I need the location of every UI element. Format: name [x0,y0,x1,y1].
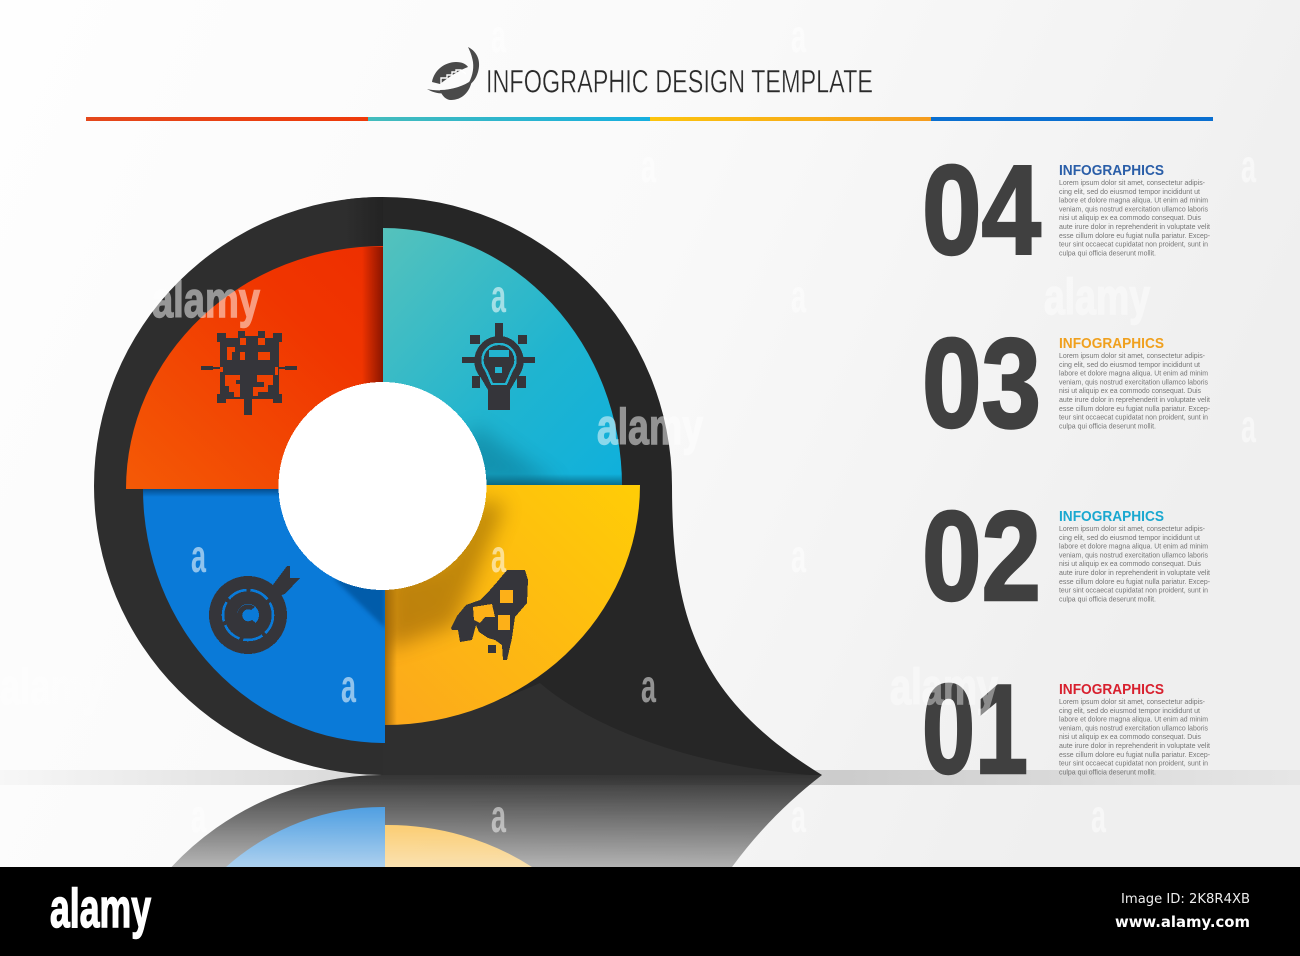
footer bar [0,867,1300,956]
watermarks: a [341,660,356,712]
text block 04: veniam, quis nostrud exercitation ullamco laboris [1059,204,1208,213]
text block 03: culpa qui officia deserunt mollit. [1059,421,1156,430]
text block 02: cing elit, sed do eiusmod tempor incididunt ut [1059,533,1201,542]
text block 04: culpa qui officia deserunt mollit. [1059,248,1156,257]
watermarks: a [641,140,656,192]
text block 01: culpa qui officia deserunt mollit. [1059,767,1156,776]
text block 04: teur sint occaecat cupidatat non proident, sunt in [1059,240,1208,249]
bubble top shading [345,197,383,246]
watermarks: a [491,10,506,62]
text block 04: cing elit, sed do eiusmod tempor incididunt ut [1059,187,1201,196]
text block 02: esse cillum dolore eu fugiat nulla pariatur. Excep- [1059,577,1210,586]
text block 03: cing elit, sed do eiusmod tempor incididunt ut [1059,360,1201,369]
footer url: www.alamy.com [1115,913,1250,931]
watermarks: a [1091,790,1106,842]
text block 01: aute irure dolor in reprehenderit in voluptate velit [1059,741,1211,750]
number 03: 03 [922,312,1041,454]
icon: target with arrow [209,566,300,654]
watermarks: a [491,790,506,842]
watermarks: a [791,530,806,582]
watermarks: alamy [890,659,998,715]
watermarks: alamy [0,659,103,715]
text block 04 [1059,178,1211,257]
text block 01: Lorem ipsum dolor sit amet, consectetur adipis- [1059,697,1205,706]
watermarks: a [191,790,206,842]
watermarks: alamy [597,399,703,455]
watermarks: a [1241,140,1256,192]
text block 01: veniam, quis nostrud exercitation ullamco laboris [1059,723,1208,732]
reflection of bubble [172,775,822,867]
text block 03 [1059,351,1211,430]
text block 02 [1059,524,1211,603]
text block 04: aute irure dolor in reprehenderit in voluptate velit [1059,222,1211,231]
bubble body [94,197,822,775]
watermarks: a [491,530,506,582]
text block 02: aute irure dolor in reprehenderit in voluptate velit [1059,568,1211,577]
segment: yellow [385,485,640,725]
text block 03: esse cillum dolore eu fugiat nulla pariatur. Excep- [1059,404,1210,413]
centre circle [278,382,486,590]
icon: light bulb [462,323,535,410]
step 03 [922,312,1211,454]
watermarks: a [1241,400,1256,452]
text block 02: teur sint occaecat cupidatat non proident, sunt in [1059,586,1208,595]
text block 02: labore et dolore magna aliqua. Ut enim ad minim [1059,542,1208,551]
text block 02: nisi ut aliquip ex ea commodo consequat. Duis [1059,559,1201,568]
number 01: 01 [922,658,1028,800]
heading 01: INFOGRAPHICS [1059,682,1164,698]
text block 03: veniam, quis nostrud exercitation ullamco laboris [1059,377,1208,386]
speech bubble pie chart [94,197,822,775]
text block 03: labore et dolore magna aliqua. Ut enim ad minim [1059,369,1208,378]
watermarks: a [791,270,806,322]
text block 03: Lorem ipsum dolor sit amet, consectetur adipis- [1059,351,1205,360]
heading 04: INFOGRAPHICS [1059,163,1164,179]
text block 01: labore et dolore magna aliqua. Ut enim ad minim [1059,715,1208,724]
bubble tail highlight [383,683,810,775]
text block 04: Lorem ipsum dolor sit amet, consectetur adipis- [1059,178,1205,187]
watermarks: alamy [1044,269,1150,325]
title with logo [427,47,873,100]
step 02 [922,485,1211,627]
text block 04: labore et dolore magna aliqua. Ut enim ad minim [1059,196,1208,205]
watermarks: a [791,10,806,62]
text block 04: nisi ut aliquip ex ea commodo consequat. Duis [1059,213,1201,222]
number 02: 02 [922,485,1041,627]
footer logo: alamy [50,877,151,939]
watermarks: a [191,530,206,582]
text block 02: culpa qui officia deserunt mollit. [1059,594,1156,603]
segment: red [126,246,384,489]
text block 01: teur sint occaecat cupidatat non proident, sunt in [1059,759,1208,768]
watermarks: a [491,270,506,322]
text block 01 [1059,697,1211,776]
text block 01: nisi ut aliquip ex ea commodo consequat. Duis [1059,732,1201,741]
text block 03: teur sint occaecat cupidatat non proident, sunt in [1059,413,1208,422]
icon: logo [427,47,479,100]
step 01 [922,658,1211,800]
heading 02: INFOGRAPHICS [1059,509,1164,525]
number 04: 04 [922,139,1041,281]
floor shadow band [0,770,1300,785]
watermarks: a [641,660,656,712]
segment: blue [143,489,385,743]
text block 03: aute irure dolor in reprehenderit in voluptate velit [1059,395,1211,404]
title text: INFOGRAPHIC DESIGN TEMPLATE [486,64,873,100]
heading 03: INFOGRAPHICS [1059,336,1164,352]
coloured rule [86,117,1213,121]
text block 04: esse cillum dolore eu fugiat nulla pariatur. Excep- [1059,231,1210,240]
step 04 [922,139,1211,281]
icon: rocket [451,570,528,660]
watermarks: alamy [152,272,260,328]
watermarks: a [791,790,806,842]
segment: teal [383,228,622,486]
text block 01: esse cillum dolore eu fugiat nulla pariatur. Excep- [1059,750,1210,759]
text block 01: cing elit, sed do eiusmod tempor incididunt ut [1059,706,1201,715]
text block 02: Lorem ipsum dolor sit amet, consectetur adipis- [1059,524,1205,533]
icon: ship wheel [201,331,297,415]
text block 03: nisi ut aliquip ex ea commodo consequat. Duis [1059,386,1201,395]
image id: Image ID: 2K8R4XB [1121,891,1250,907]
text block 02: veniam, quis nostrud exercitation ullamco laboris [1059,550,1208,559]
